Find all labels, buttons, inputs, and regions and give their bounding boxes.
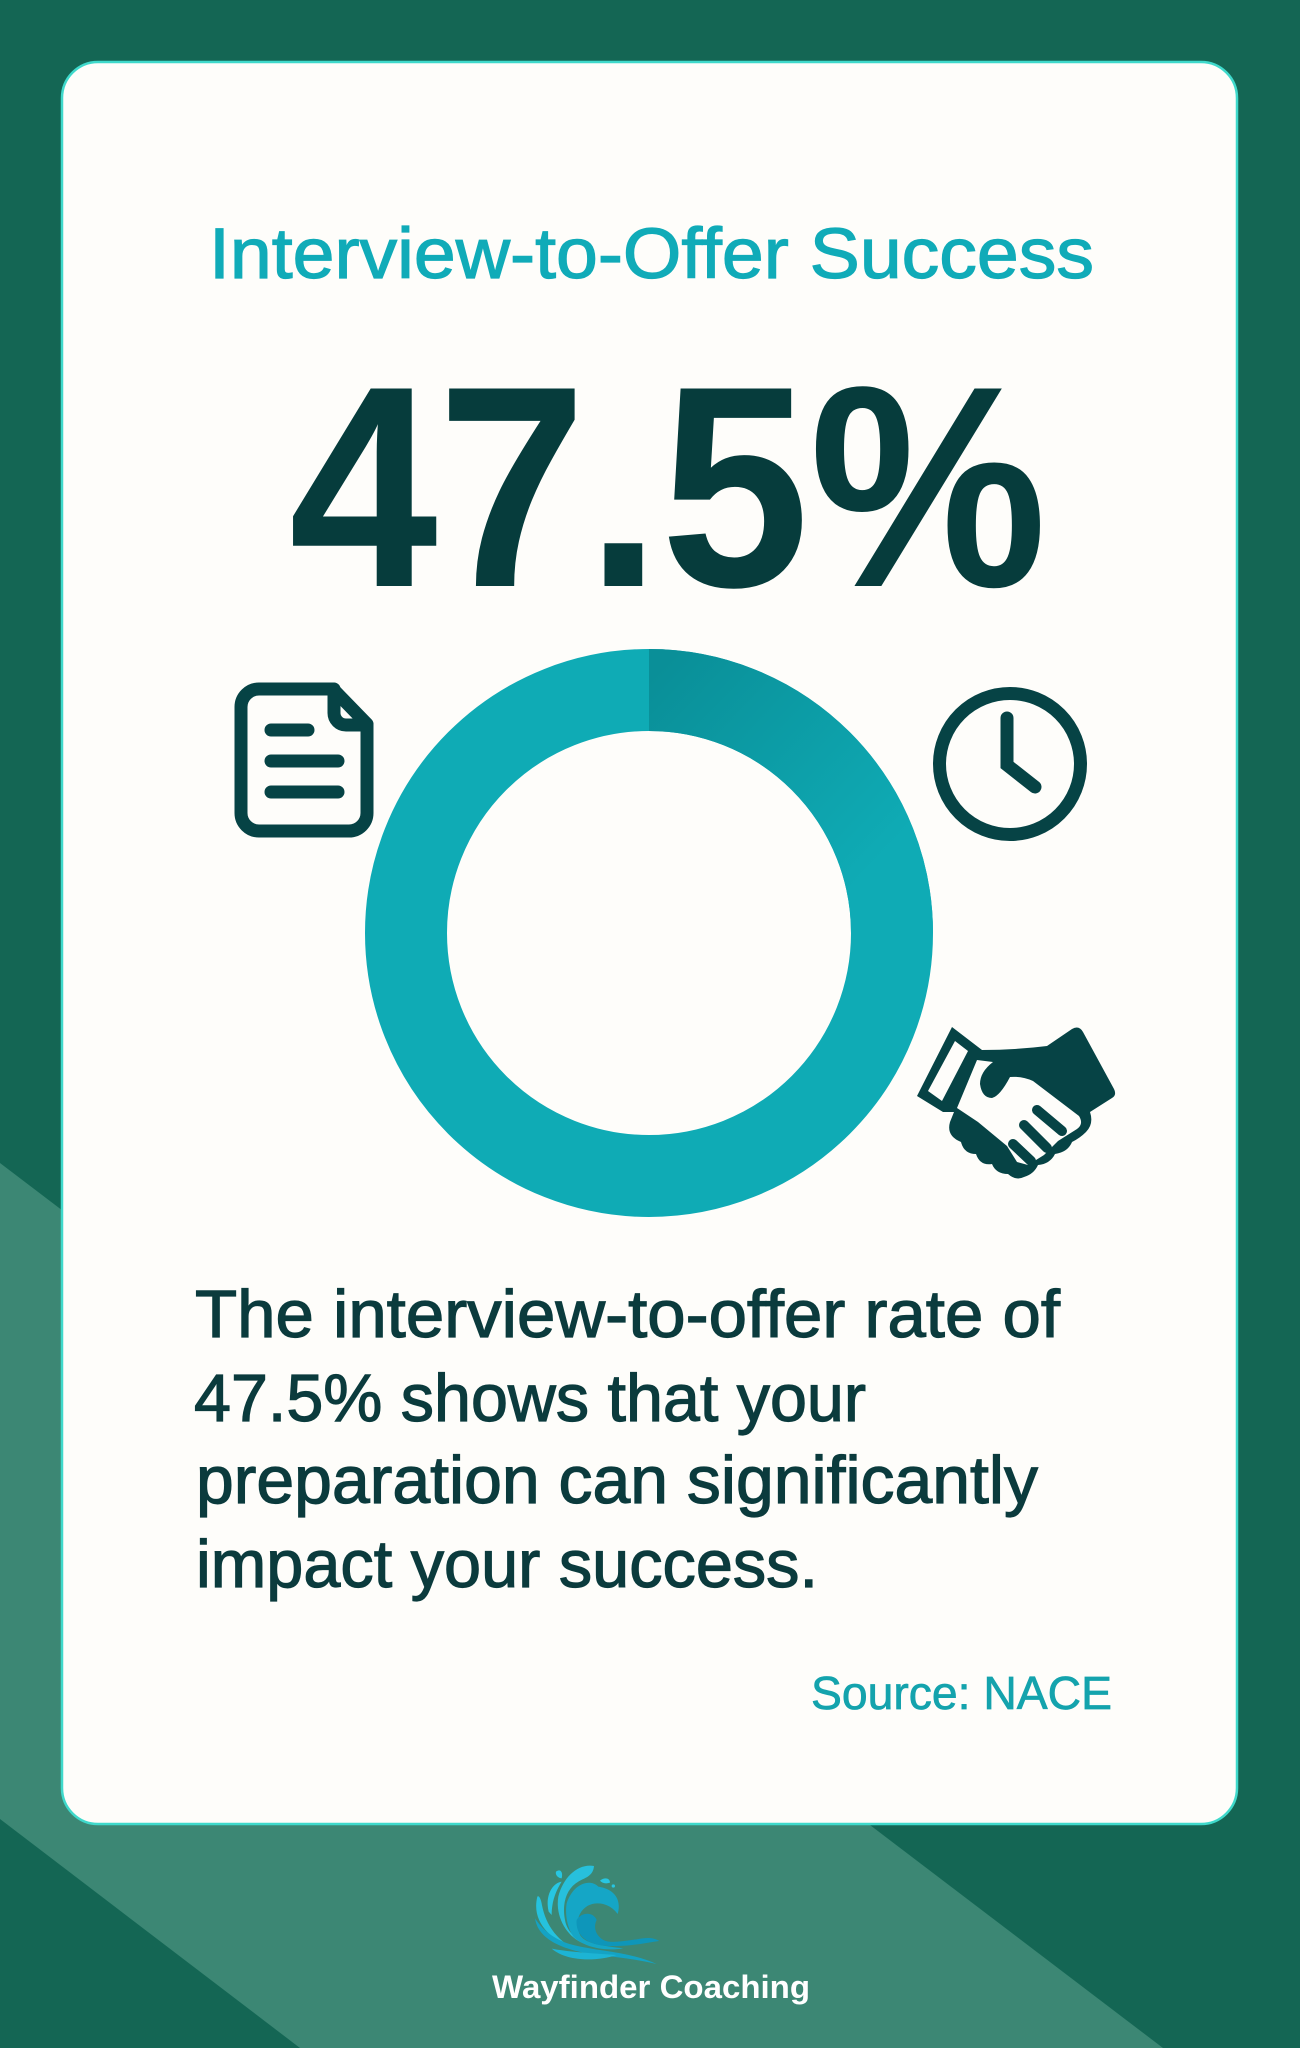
- body text: impact your success.: [196, 1527, 818, 1602]
- brand name: Wayfinder Coaching: [492, 1969, 810, 2005]
- big number: 47.5%: [289, 326, 1047, 647]
- icon: wave: [535, 1866, 659, 1964]
- body text: preparation can significantly: [196, 1443, 1038, 1518]
- body text: 47.5% shows that your: [194, 1361, 866, 1436]
- title: Interview-to-Offer Success: [209, 215, 1094, 294]
- logo: Wayfinder Coaching: [492, 1866, 810, 2005]
- panel: white card: [62, 62, 1237, 1824]
- donut chart: [406, 690, 892, 1176]
- body text: The interview-to-offer rate of: [195, 1277, 1060, 1352]
- source note: Source: NACE: [811, 1667, 1112, 1719]
- icon: handshake: [917, 1027, 1115, 1178]
- body text: [194, 1277, 1060, 1602]
- icon: clock: [940, 694, 1080, 834]
- icon: document: [241, 689, 367, 831]
